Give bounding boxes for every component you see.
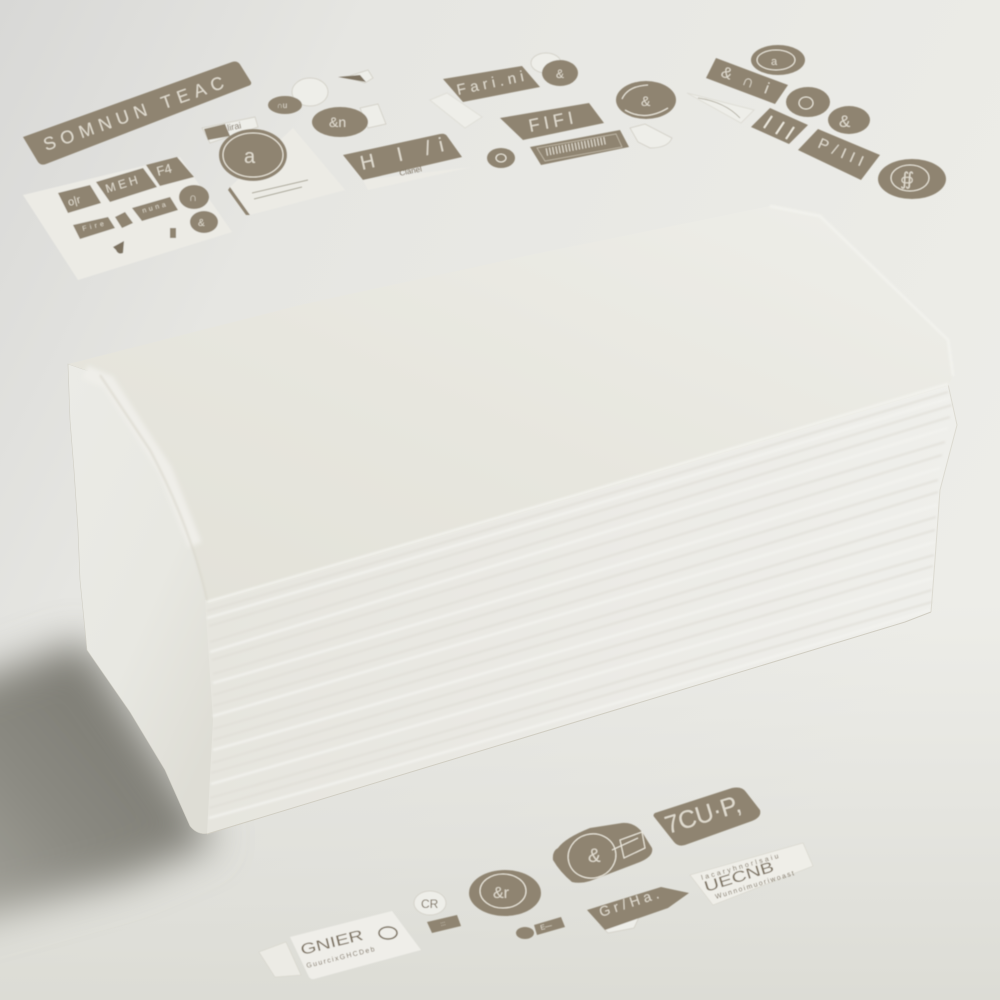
icon sheet: nuna — [142, 202, 167, 215]
icon sheet: o|r — [67, 194, 82, 209]
icon sheet — [23, 157, 232, 280]
round label — [531, 53, 578, 86]
barcode tile: IIIIIIIIIIIIIIIIIII — [544, 135, 607, 159]
small round seal — [487, 148, 515, 168]
top-centre labels — [430, 53, 676, 168]
folded white tab — [259, 942, 301, 977]
outlined ghost icon: CR — [421, 897, 439, 911]
ghost note — [430, 93, 482, 128]
tile with bars — [751, 108, 808, 144]
banner label: SOMNUN TEAC — [41, 72, 226, 155]
price tile — [654, 788, 760, 846]
icon sheet: ∩ — [189, 192, 197, 204]
tile with glyphs: P/III — [815, 135, 866, 170]
white text label: Wunnoimuoriwoast — [715, 870, 795, 901]
small strip label — [202, 117, 258, 143]
towel stack — [68, 206, 957, 834]
icon sheet: F4 — [155, 160, 173, 179]
note card with seal: a — [244, 146, 256, 168]
top-right labels — [687, 45, 946, 199]
folded arrow label — [587, 885, 689, 933]
round icon — [786, 87, 830, 117]
large round seal: & — [641, 93, 651, 109]
tile — [443, 66, 540, 102]
stack: top face — [68, 206, 953, 604]
angled tile: &∩i — [719, 64, 771, 98]
small circle and tag — [516, 917, 565, 939]
white text label: UECNB — [702, 859, 776, 896]
stack: long front face with sheet layers — [205, 384, 957, 834]
wide tile — [500, 103, 604, 140]
wide tile with caption: Clanel — [399, 164, 423, 178]
wide tile: FIFI — [527, 108, 575, 136]
icon sheet: Fire — [82, 221, 105, 233]
small strip label: lirai — [226, 120, 242, 133]
round seal — [751, 45, 805, 75]
icon sheet: MEH — [104, 173, 139, 196]
round icon: & — [839, 112, 851, 131]
ghost blob — [630, 124, 672, 148]
tile: Fari.ni — [455, 68, 525, 99]
round seal: a — [771, 56, 778, 68]
white label card: GuurcixGHCDeb — [306, 946, 375, 970]
white text label — [690, 843, 813, 905]
stack: end face — [68, 364, 214, 834]
round seal: &r — [493, 885, 510, 902]
large round seal — [616, 81, 676, 119]
tile with glyphs — [798, 129, 880, 180]
small tile — [427, 915, 461, 933]
bottom labels — [259, 788, 813, 979]
round seal — [469, 870, 541, 916]
icon sheet: & — [198, 218, 205, 229]
ghost sketch note — [687, 93, 754, 123]
white label card — [290, 911, 421, 979]
large round seal — [878, 159, 946, 199]
white text label: lacaryhnorlsaiu — [701, 853, 780, 882]
small triangle tag — [338, 70, 373, 83]
wide tile with caption: H I /i — [358, 134, 446, 175]
white label card: GNIER — [299, 927, 365, 959]
small circle and tag: E— — [540, 922, 553, 932]
round drop label — [268, 78, 328, 114]
stack: top face fold highlights — [85, 206, 953, 602]
small tile: ::: — [440, 921, 447, 928]
top-left labels — [23, 62, 472, 280]
folded arrow label: Gr/Ha. — [597, 885, 661, 920]
price tile: 7CU·P, — [662, 790, 744, 840]
banner label — [23, 62, 251, 165]
round seal — [312, 104, 386, 137]
large rounded icon — [553, 823, 652, 883]
round icon — [828, 106, 870, 134]
outlined ghost icon — [414, 891, 446, 915]
barcode tile — [530, 130, 629, 165]
note card with seal — [219, 128, 345, 215]
large round seal: ∯ — [900, 169, 914, 189]
cast shadow — [0, 640, 215, 935]
round drop label: ∩u — [277, 101, 287, 110]
large rounded icon: & — [588, 846, 601, 867]
round label: & — [556, 67, 564, 81]
angled tile — [706, 58, 788, 104]
wide tile with caption — [343, 134, 472, 190]
round seal: &n — [329, 114, 346, 130]
